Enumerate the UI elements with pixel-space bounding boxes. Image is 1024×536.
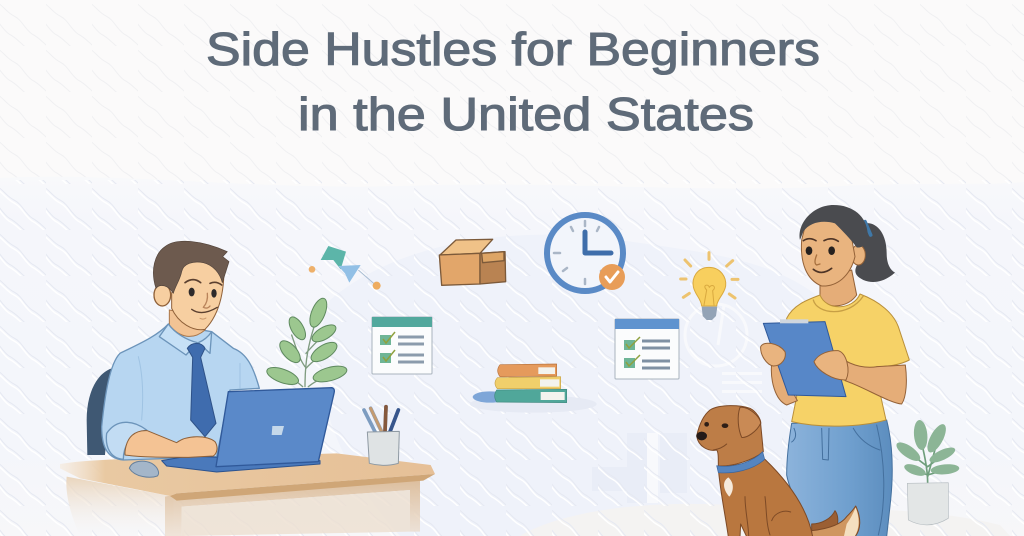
forearm and hand [125,431,217,457]
title line 1: Side Hustles for Beginners [206,23,820,75]
chair [87,368,112,455]
shirt shading [138,357,240,420]
hair [800,205,868,247]
icon: stack of books [470,364,597,413]
dog body [718,459,813,536]
dog chest patch [724,477,733,497]
icon: clock with check badge [547,215,625,291]
dog leg lines [745,497,791,536]
t-shirt [787,294,909,426]
rolled sleeve [106,422,147,459]
icon: blue checklist window [615,319,679,379]
shirt [102,324,259,460]
dog face [696,422,728,450]
neck [820,270,857,306]
laptop [162,388,334,472]
mouse [129,461,159,477]
jeans details [792,425,884,535]
collar [159,324,212,355]
decorative kite [309,246,381,290]
woman's facial features [803,239,838,272]
potted plant [894,419,960,525]
illustration: woman, dog and potted plant [681,205,960,536]
clipboard [763,319,846,397]
check badge [599,264,625,290]
pencil cup [364,407,399,465]
neck [169,310,210,336]
facial features [185,280,222,319]
ponytail [855,223,895,282]
head [153,241,229,336]
icon: teal checklist window [372,317,432,374]
icon: cardboard box [439,239,506,285]
jeans [787,420,892,536]
face [172,258,224,330]
hair tie [865,222,871,235]
shirt collar [813,296,863,312]
dog collar [717,452,765,473]
dog head [697,406,763,466]
left hand [761,343,785,366]
ear [851,245,865,265]
icon: lightbulb [681,253,738,320]
dog [696,406,860,536]
title [206,23,820,140]
face [801,220,855,286]
right hand [814,351,848,380]
right arm [842,358,906,404]
ear [154,284,171,306]
dog ear [738,407,761,437]
title line 2: in the United States [298,88,754,140]
desk [60,453,435,536]
hair [153,241,229,293]
tie [187,343,216,437]
left arm [771,363,797,405]
dog tail [812,511,838,532]
plant [265,296,348,388]
illustration: man at desk [60,241,435,536]
